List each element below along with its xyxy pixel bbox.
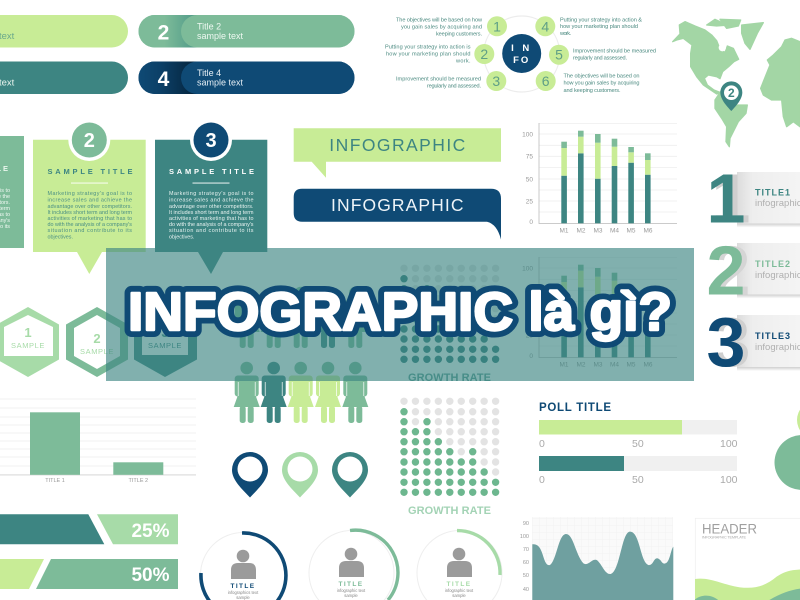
stacked bar chart: M1 xyxy=(559,228,569,234)
numbered label 1: 1 xyxy=(712,160,750,238)
banner panel xyxy=(106,248,694,381)
diagram: info circle with six steps xyxy=(385,16,656,94)
hexagon 1 xyxy=(0,307,59,377)
profile ring 2: TITLE xyxy=(338,581,364,588)
numbered label 1: TITLE1 xyxy=(755,188,791,198)
pill: title 3 xyxy=(0,62,128,94)
main title: INFOGRAPHIC là gì? xyxy=(128,282,672,342)
numbered label 3: 3 xyxy=(712,303,750,381)
diagram: info circle with six steps: Putting your strategy into action & xyxy=(560,17,642,23)
card: sample title 2: 2 xyxy=(84,130,95,152)
poll bars: 100 xyxy=(720,474,738,486)
profile ring 2: sample xyxy=(344,593,358,598)
decorative blob xyxy=(774,401,800,490)
profile ring 3 xyxy=(417,530,502,600)
poll bars: 0 xyxy=(539,438,545,450)
callout: green infographic xyxy=(294,128,501,178)
stacked bar chart under banner: M3 xyxy=(593,362,603,368)
stacked bar chart under banner: M6 xyxy=(643,362,653,368)
map pin green xyxy=(282,452,318,498)
poll bars: 50 xyxy=(632,438,644,450)
hexagon 3: 3 xyxy=(161,325,169,340)
pill: title 4: 4 xyxy=(158,68,170,91)
pill: title 4 xyxy=(138,62,354,94)
area chart: 40 xyxy=(523,587,529,593)
diagram: info circle with six steps: Improvement should be measured xyxy=(396,76,481,82)
diagram: info circle with six steps: 5 xyxy=(555,47,563,63)
card: sample title 3 xyxy=(155,119,267,274)
diagram: info circle with six steps: The objectives will be based on how xyxy=(396,17,483,23)
card: sample title 2: do with the analysis of a company's xyxy=(48,222,132,228)
stacked bar chart under banner xyxy=(522,257,677,368)
area chart: 60 xyxy=(523,560,529,566)
profile ring 1: infographics text xyxy=(228,590,259,595)
poll bars: 100 xyxy=(720,438,738,450)
hexagon 1: 1 xyxy=(24,325,32,340)
diagram: info circle with six steps: how your marketing plan should xyxy=(386,51,470,57)
area chart: 50 xyxy=(523,573,529,579)
main title: INFOGRAPHIC là gì? xyxy=(128,282,672,342)
dot grid growth rate under banner: GROWTH RATE xyxy=(408,372,491,384)
profile ring 2 xyxy=(309,530,398,600)
card: sample title 2: SAMPLE TITLE xyxy=(48,167,132,176)
people row xyxy=(234,362,368,423)
card: sample title 2: activities of marketing that has to xyxy=(48,216,132,222)
card: sample title 3: advantage over other competitors. xyxy=(169,204,254,210)
card: sample title 3: activities of marketing that has to xyxy=(169,216,254,222)
dot grid growth rate: GROWTH RATE xyxy=(408,505,491,517)
diagram: info circle with six steps: you gain sales by acquiring and xyxy=(401,24,482,30)
header card: HEADER xyxy=(702,520,757,536)
card: sample title 2: situation and contribute to its xyxy=(48,228,132,234)
percentage bar 25%: 25% xyxy=(131,521,170,542)
card: sample title 3: objectives. xyxy=(169,234,194,240)
diagram: info circle with six steps: regularly and assessed. xyxy=(573,56,627,62)
stacked bar chart under banner: M2 xyxy=(576,362,586,368)
map pin navy xyxy=(232,452,268,498)
numbered label 3 xyxy=(707,303,800,381)
callout: navy infographic xyxy=(294,189,501,240)
world map with pin: 2 xyxy=(728,86,735,100)
map pin teal xyxy=(332,452,368,498)
card: sample title 3: do with the analysis of a company's xyxy=(169,222,254,228)
numbered label 1: 1 xyxy=(707,160,745,238)
percentage bar 50%: 50% xyxy=(131,565,170,586)
pill: title 2 xyxy=(138,15,354,48)
people row under banner xyxy=(234,287,368,348)
diagram: info circle with six steps: 3 xyxy=(492,73,500,89)
world map with pin xyxy=(673,19,800,147)
pill: title 2: sample text xyxy=(197,31,244,41)
pill: title 2: Title 2 xyxy=(197,22,221,32)
stacked bar chart: M4 xyxy=(610,228,619,234)
pill: title 4: Title 4 xyxy=(197,68,221,78)
stacked bar chart: 100 xyxy=(522,132,533,138)
diagram: info circle with six steps: FO xyxy=(513,55,530,66)
diagram: info circle with six steps: work. xyxy=(559,31,571,37)
card: sample title 2: increase sales and achieve the xyxy=(48,197,132,203)
numbered label 1 xyxy=(707,160,800,238)
numbered label 2: TITLE2 xyxy=(755,259,791,269)
diagram: info circle with six steps: Improvement should be measured xyxy=(573,49,656,55)
hexagon 2: SAMPLE xyxy=(80,347,114,356)
dot grid growth rate xyxy=(404,401,496,517)
poll bars: 0 xyxy=(539,474,545,486)
stacked bar chart: 75 xyxy=(526,154,533,160)
poll bars: 50 xyxy=(632,474,644,486)
hexagon 2: 2 xyxy=(93,331,101,346)
stacked bar chart: M2 xyxy=(576,228,586,234)
card: sample title 3: increase sales and achieve the xyxy=(169,197,254,203)
stacked bar chart: M6 xyxy=(643,228,653,234)
card: sample title 3: It includes short term and long term xyxy=(169,210,254,216)
diagram: info circle with six steps: I N xyxy=(511,43,532,54)
diagram: info circle with six steps: work. xyxy=(455,58,471,64)
stacked bar chart under banner: M1 xyxy=(559,362,569,368)
percentage bar 50% xyxy=(0,559,178,589)
stacked bar chart: 0 xyxy=(529,219,533,226)
header card xyxy=(695,518,800,600)
stacked bar chart: M3 xyxy=(593,228,603,234)
stacked bar chart under banner: 0 xyxy=(529,353,533,360)
card: sample title 2: advantage over other competitors. xyxy=(48,204,132,210)
diagram: info circle with six steps: The objectives will be based on xyxy=(564,74,640,80)
diagram: info circle with six steps: 4 xyxy=(541,18,549,34)
diagram: info circle with six steps: 2 xyxy=(480,46,488,62)
diagram: info circle with six steps: regularly and assessed. xyxy=(427,84,481,90)
stacked bar chart under banner: 50 xyxy=(526,310,533,318)
profile ring 3: TITLE xyxy=(446,581,472,588)
card: sample title 3: 3 xyxy=(205,130,217,152)
stacked bar chart: M5 xyxy=(626,228,636,234)
numbered label 2 xyxy=(707,232,800,310)
card: sample title 3: Marketing strategy's goal is to xyxy=(169,191,254,197)
callout: green infographic: INFOGRAPHIC xyxy=(329,135,465,155)
percentage bar 25% xyxy=(0,514,178,544)
area chart: 90 xyxy=(523,521,529,527)
diagram: info circle with six steps: 6 xyxy=(542,73,550,89)
diagram: info circle with six steps: how you gain sales by acquiring xyxy=(564,81,640,87)
card: sample title 2: Marketing strategy's goal is to xyxy=(48,191,132,197)
stacked bar chart under banner: M4 xyxy=(610,362,619,368)
pill: title 4: sample text xyxy=(197,78,244,88)
stacked bar chart under banner: 75 xyxy=(526,288,533,294)
profile ring 2: infographic text xyxy=(337,588,366,593)
profile ring 3: infographic text xyxy=(445,588,474,593)
diagram: info circle with six steps: Putting your strategy into action is xyxy=(385,45,471,51)
card: sample title 2: objectives. xyxy=(48,234,73,240)
stacked bar chart: 50 xyxy=(526,176,533,184)
card: sample title 3: situation and contribute to its xyxy=(169,228,254,234)
card: sample title 2 xyxy=(33,119,146,274)
pill: title 1 xyxy=(0,15,128,48)
stacked bar chart under banner: M5 xyxy=(626,362,636,368)
poll bars: POLL TITLE xyxy=(539,402,611,414)
profile ring 1 xyxy=(200,532,286,600)
stacked bar chart under banner: 100 xyxy=(522,266,533,272)
numbered label 2: 2 xyxy=(712,232,750,310)
numbered label 3: 3 xyxy=(707,303,745,381)
stacked bar chart under banner: 25 xyxy=(526,332,533,340)
diagram: info circle with six steps: 1 xyxy=(493,18,501,34)
card: sample title 3: SAMPLE TITLE xyxy=(169,167,254,176)
simple bar chart: TITLE 2 xyxy=(129,478,148,484)
area chart: 70 xyxy=(523,547,529,553)
hexagon 3: SAMPLE xyxy=(148,341,182,350)
poll bars xyxy=(539,402,738,486)
hexagon 3 xyxy=(134,307,197,377)
hexagon 1: SAMPLE xyxy=(11,341,45,350)
header card: INFOGRAPHIC TEMPLATE xyxy=(702,536,746,540)
dot grid growth rate under banner xyxy=(404,268,496,384)
profile ring 3: sample xyxy=(452,593,466,598)
simple bar chart: TITLE 1 xyxy=(45,478,65,484)
profile ring 1: sample xyxy=(236,595,250,600)
stacked bar chart: 25 xyxy=(526,198,533,206)
numbered label 2: 2 xyxy=(707,232,745,310)
diagram: info circle with six steps: how your marketing plan should xyxy=(560,24,638,30)
stacked bar chart xyxy=(522,123,677,234)
simple bar chart xyxy=(0,399,196,484)
numbered label 3: TITLE3 xyxy=(755,331,791,341)
card: sample title 2: It includes short term and long term xyxy=(48,210,132,216)
profile ring 1: TITLE xyxy=(230,583,256,590)
hexagon 2 xyxy=(66,307,128,377)
callout: navy infographic: INFOGRAPHIC xyxy=(331,195,464,215)
area chart xyxy=(520,517,673,600)
pill: title 2: 2 xyxy=(158,22,169,44)
diagram: info circle with six steps: and keeping customers. xyxy=(564,88,621,94)
area chart: 100 xyxy=(520,534,529,540)
diagram: info circle with six steps: keeping customers. xyxy=(436,32,482,38)
card: partial sample 1 xyxy=(0,136,24,248)
